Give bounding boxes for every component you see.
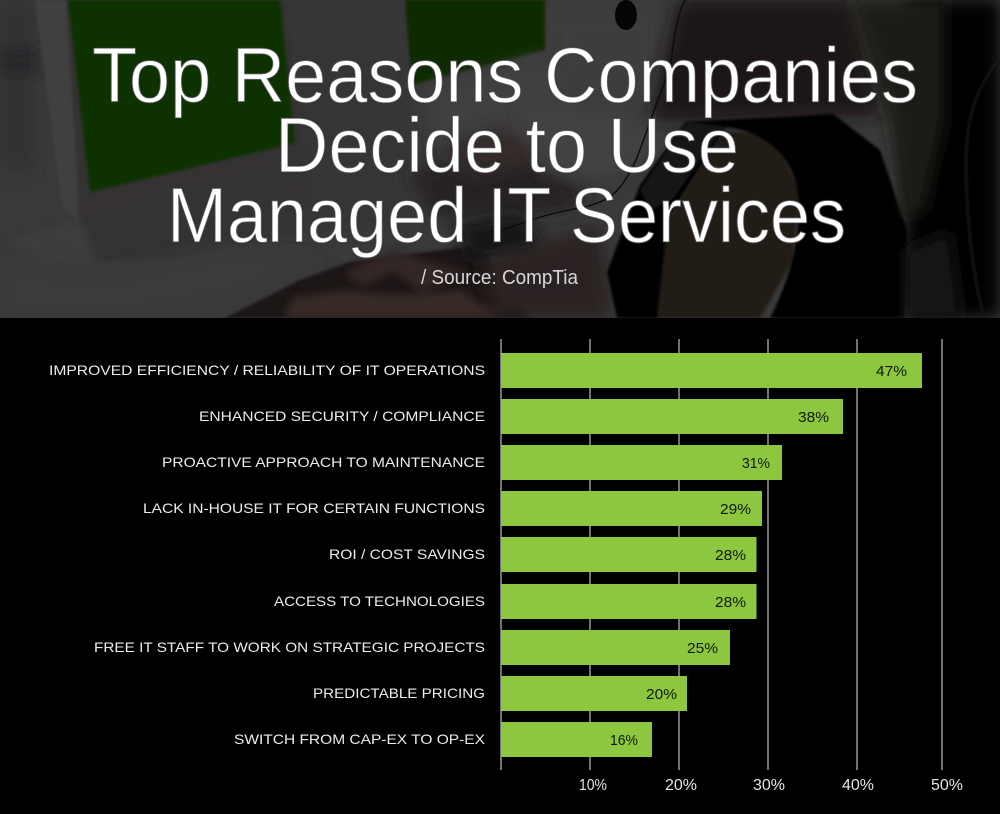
bar value labels: 29% <box>720 501 751 518</box>
bars <box>501 353 922 757</box>
hero photo: office worker at a computer <box>0 0 1000 318</box>
hands on keyboard <box>348 250 465 291</box>
x axis labels: 20% <box>665 777 697 794</box>
woman: black top and strap <box>607 114 907 318</box>
bar value labels: 38% <box>798 409 829 426</box>
x axis labels <box>579 777 963 794</box>
category labels: ACCESS TO TECHNOLOGIES <box>274 593 485 609</box>
keyboard and desk <box>225 245 530 318</box>
category labels: LACK IN-HOUSE IT FOR CERTAIN FUNCTIONS <box>143 500 485 516</box>
x axis labels: 10% <box>579 777 607 794</box>
category labels: PROACTIVE APPROACH TO MAINTENANCE <box>162 454 485 470</box>
category labels: FREE IT STAFF TO WORK ON STRATEGIC PROJECTS <box>94 639 485 655</box>
x axis labels: 30% <box>753 777 785 794</box>
x axis labels: 40% <box>842 777 874 794</box>
x axis labels: 50% <box>931 777 963 794</box>
bar value labels <box>610 363 907 749</box>
title: Top Reasons Companies <box>92 31 918 119</box>
second green monitor screen <box>405 0 545 85</box>
title: Decide to Use <box>275 101 739 189</box>
source line: / Source: CompTia <box>421 267 579 289</box>
woman: neck and shoulder skin <box>650 0 880 120</box>
bar value labels: 16% <box>610 732 638 749</box>
category labels: IMPROVED EFFICIENCY / RELIABILITY OF IT OPERATIONS <box>49 362 485 378</box>
category labels: SWITCH FROM CAP-EX TO OP-EX <box>234 731 486 747</box>
bar chart <box>49 339 963 794</box>
category labels: PREDICTABLE PRICING <box>313 685 485 701</box>
bar value labels: 20% <box>646 686 677 703</box>
monitor casing <box>36 2 47 78</box>
category labels: ROI / COST SAVINGS <box>329 546 485 562</box>
green monitor screen <box>68 0 295 192</box>
title <box>92 31 918 259</box>
bar value labels: 28% <box>715 594 746 611</box>
bar value labels: 31% <box>742 455 770 472</box>
category labels <box>49 362 486 747</box>
bar value labels: 47% <box>876 363 907 380</box>
category labels: ENHANCED SECURITY / COMPLIANCE <box>199 408 485 424</box>
headset earpiece and cable <box>490 0 685 232</box>
bar value labels: 28% <box>715 547 746 564</box>
chart gridlines <box>501 339 942 770</box>
title: Managed IT Services <box>167 171 846 259</box>
woman: hair and dark surroundings <box>905 0 1000 318</box>
bar value labels: 25% <box>687 640 718 657</box>
